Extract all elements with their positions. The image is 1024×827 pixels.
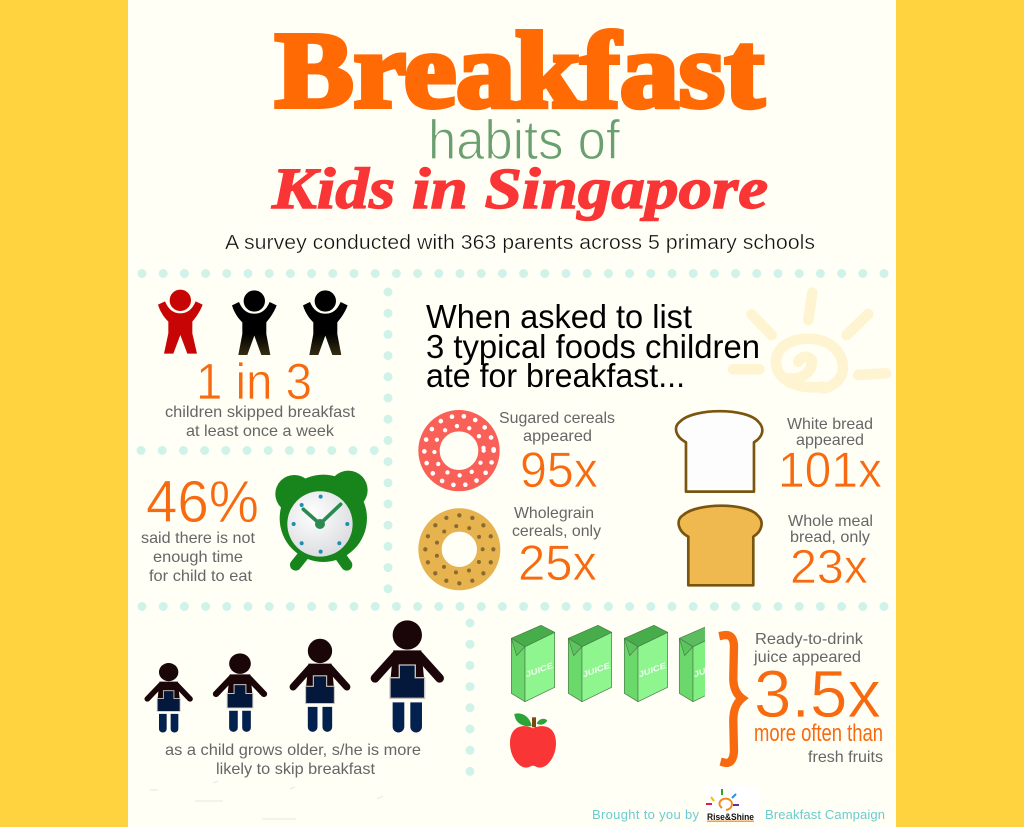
text: sugared cereals: appeared — [523, 428, 592, 445]
icon: apple — [510, 713, 556, 768]
icon: juice box 1 — [511, 625, 555, 702]
heading: when asked — [426, 298, 760, 394]
text: breakfast campaign: Breakfast Campaign — [765, 807, 885, 822]
text: white bread — [787, 416, 873, 449]
title — [225, 12, 815, 254]
icon: juice box 4 — [679, 626, 705, 702]
text: white bread: White bread — [787, 416, 873, 433]
icon: juice box 1: JUICE — [524, 661, 555, 679]
text: more often than: more often than — [754, 720, 883, 747]
panel: juice versus fruit — [510, 625, 883, 768]
text: whole meal bread — [788, 513, 873, 546]
text: not enough time: enough time — [153, 549, 243, 566]
icon: three children — [158, 289, 348, 355]
text: not enough time: said there is not — [141, 530, 256, 547]
text: whole meal bread: Whole meal — [788, 513, 873, 530]
text: wholegrain cereals: cereals, only — [512, 523, 601, 540]
heading: habits of: habits of — [428, 108, 620, 171]
icon: orange brace — [723, 635, 742, 763]
panel: 1 in 3 children — [158, 289, 356, 440]
stat: 1 in 3: 1 in 3 — [196, 353, 312, 410]
icon: black child — [303, 289, 348, 355]
text: wholegrain cereals: Wholegrain — [514, 505, 594, 522]
text: ready-to-drink: juice appeared — [753, 649, 861, 666]
heading: when asked: 3 typical foods children — [426, 328, 760, 365]
icon: juice box 3 — [624, 625, 668, 702]
icon: wholegrain cereal ring — [425, 515, 493, 583]
stat: 25x: 25x — [518, 535, 597, 591]
text: as a child grows older: likely to skip breakfast — [216, 761, 376, 778]
icon: juice box 2 — [568, 625, 612, 702]
footer: credit — [592, 786, 885, 822]
text: not enough time — [141, 530, 256, 585]
icon: whole meal bread — [679, 506, 762, 585]
text: sugared cereals: Sugared cereals — [499, 410, 615, 427]
icon: child 4 — [375, 620, 440, 732]
stat: 46%: 46% — [146, 469, 259, 535]
panel: 46 percent — [141, 469, 368, 585]
icon: juice box 4: JUICE — [692, 661, 723, 679]
subtitle: A survey conducted with 363 parents across 5 primary schools — [225, 232, 815, 254]
icon: sugared cereal ring — [424, 416, 494, 485]
stat: 3.5x: 3.5x — [754, 657, 881, 732]
text: children skipped: children skipped breakfast — [165, 404, 356, 421]
stat: 95x: 95x — [520, 442, 598, 498]
stat: 23x: 23x — [790, 541, 868, 594]
heading: Breakfast: Breakfast — [275, 12, 764, 130]
text: as a child grows older: as a child grows older, s/he is more — [165, 742, 421, 759]
text: as a child grows older — [165, 742, 421, 778]
logo: Rise and Shine — [705, 786, 760, 822]
text: whole meal bread: bread, only — [790, 529, 870, 546]
icon: green alarm clock — [275, 471, 368, 565]
text: ready-to-drink — [753, 631, 864, 666]
icon: juice box 2: JUICE — [581, 661, 612, 679]
text: at least once a week: at least once a week — [186, 423, 335, 440]
text: white bread: appeared — [796, 432, 864, 449]
icon: black child — [232, 289, 277, 355]
text: not enough time: for child to eat — [149, 568, 253, 585]
panel: cream page — [128, 0, 896, 827]
text: ready-to-drink: Ready-to-drink — [755, 631, 864, 648]
icon: sun — [733, 293, 886, 388]
text: fresh fruits: fresh fruits — [808, 749, 883, 766]
heading: Kids in Singapore: Kids in Singapore — [271, 156, 768, 221]
icon: child 1 — [147, 663, 190, 733]
icon: juice box 3: JUICE — [637, 661, 668, 679]
icon: white bread — [676, 411, 762, 492]
panel: growing children — [147, 620, 440, 778]
icon: child 2 — [216, 653, 264, 732]
heading: when asked: ate for breakfast... — [426, 357, 685, 394]
text: brought to you by: Brought to you by — [592, 807, 700, 822]
panel: typical foods — [424, 293, 886, 594]
logo: Rise and Shine: Rise&Shine — [707, 812, 754, 822]
icon: child 3 — [293, 639, 347, 732]
icon: red child — [158, 289, 203, 354]
icon: four growing children — [147, 620, 440, 733]
icon: juice boxes — [511, 625, 723, 702]
text: wholegrain cereals — [512, 505, 601, 540]
stat: 101x: 101x — [778, 442, 882, 498]
heading: when asked: When asked to list — [426, 298, 692, 335]
text: sugared cereals — [499, 410, 615, 445]
